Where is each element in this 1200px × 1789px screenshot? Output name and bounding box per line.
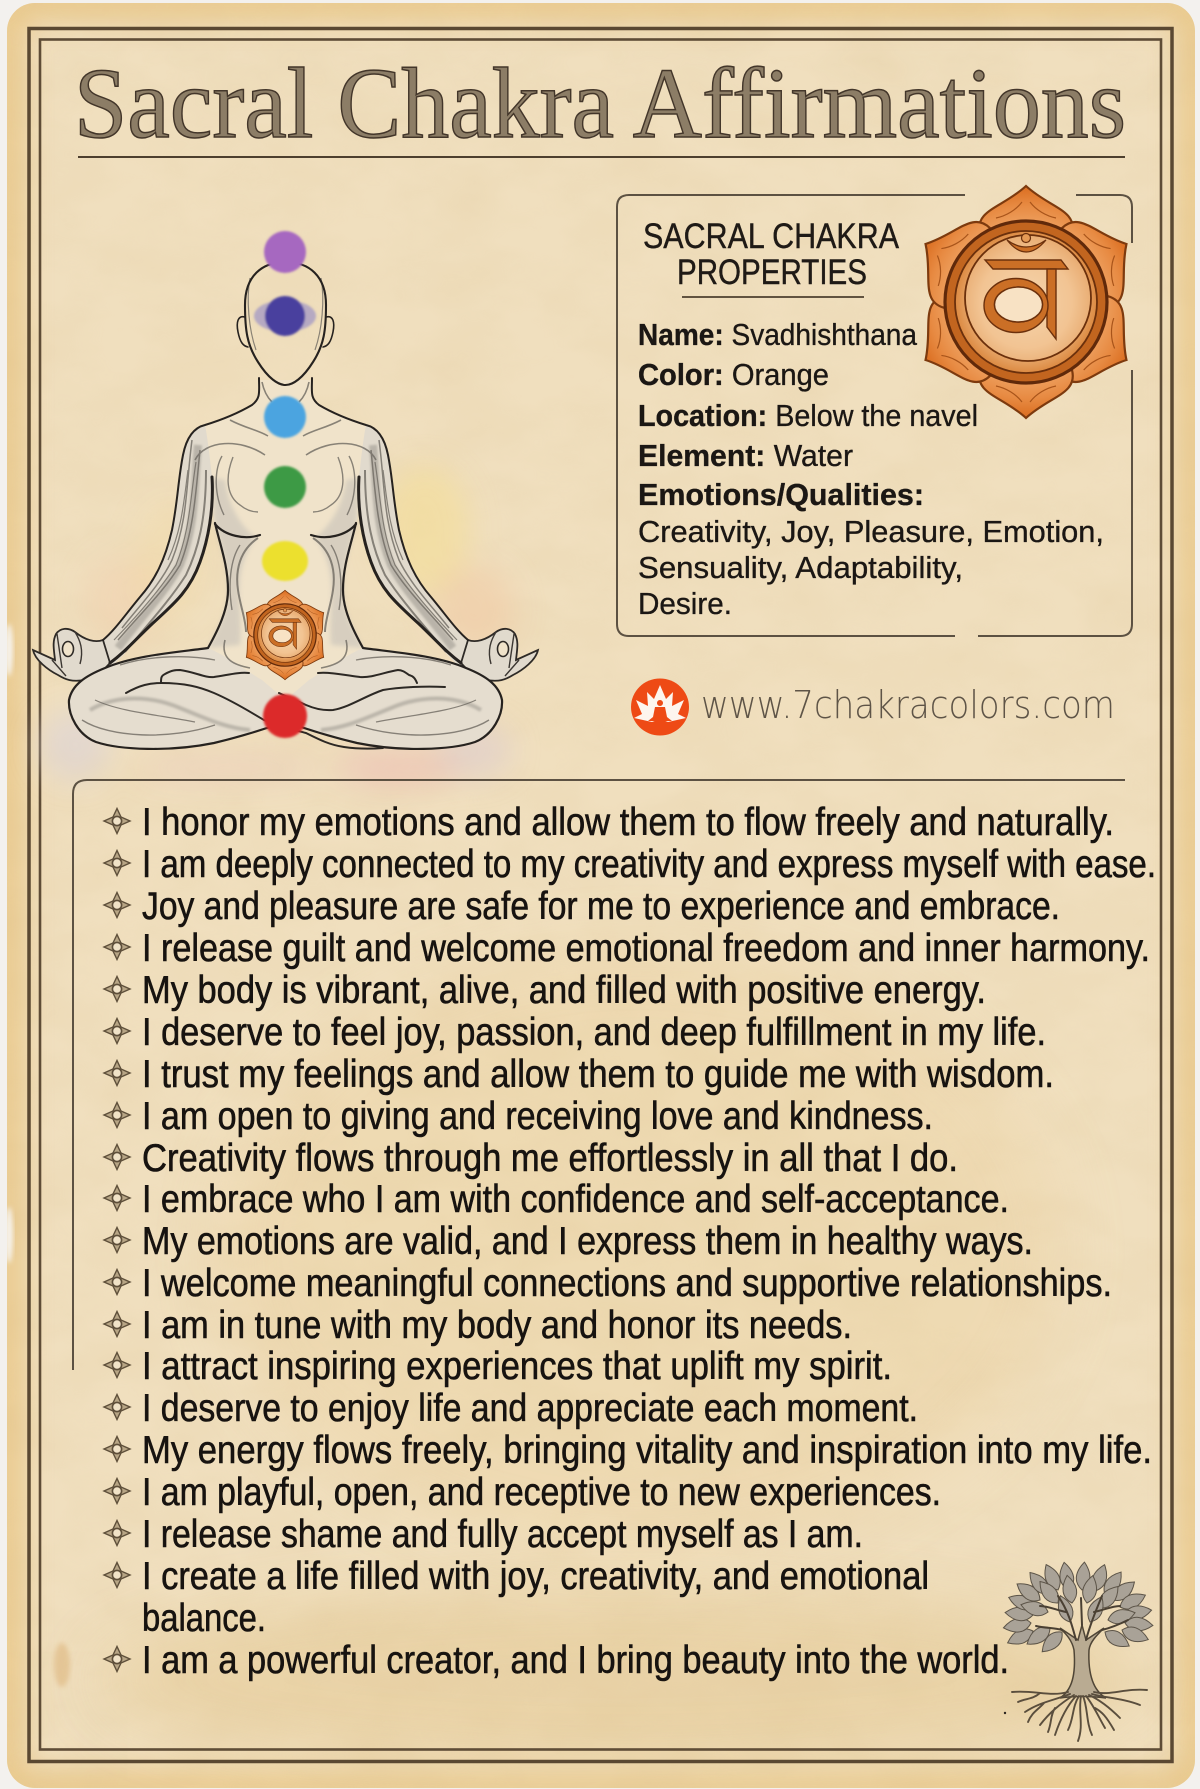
properties box outline (617, 195, 1132, 636)
heading rule (682, 296, 864, 298)
property: emotions values (638, 515, 1104, 621)
affirmation 5: My body is vibrant, alive, and filled with positive energy. (142, 969, 986, 1012)
property: emotions values: Creativity, Joy, Pleasure, Emotion, (638, 515, 1104, 549)
panel: properties (617, 195, 1132, 636)
affirmation 3: Joy and pleasure are safe for me to experience and embrace. (142, 885, 1060, 928)
affirmation 10: I embrace who I am with confidence and self-acceptance. (142, 1178, 1009, 1221)
affirmation 15: I deserve to enjoy life and appreciate each moment. (142, 1387, 918, 1430)
affirmations box outline (73, 780, 1125, 1370)
panel: affirmations (73, 780, 1156, 1682)
affirmation 7: I trust my feelings and allow them to guide me with wisdom. (142, 1053, 1054, 1096)
affirmation 9: Creativity flows through me effortlessly in all that I do. (142, 1137, 958, 1180)
properties heading (643, 217, 900, 292)
figure: left half of body (33, 262, 286, 749)
chakra: third eye (254, 296, 316, 336)
affirmation 6: I deserve to feel joy, passion, and deep fulfillment in my life. (142, 1011, 1046, 1054)
affirmation 20: I am a powerful creator, and I bring beauty into the world. (142, 1639, 1009, 1682)
affirmation 17: I am playful, open, and receptive to new experiences. (142, 1471, 941, 1514)
properties heading: PROPERTIES (677, 253, 867, 292)
property: location: Location: Below the navel (638, 399, 978, 433)
affirmation 11: My emotions are valid, and I express them in healthy ways. (142, 1220, 1033, 1263)
property: name: Name: Svadhishthana (638, 318, 917, 352)
affirmation 18: I release shame and fully accept myself as I am. (142, 1513, 863, 1556)
icon: tree of life (1002, 1561, 1153, 1741)
affirmation 19: I create a life filled with joy, creativity, and emotional (142, 1555, 929, 1598)
title: Sacral Chakra Affirmations (74, 47, 1126, 159)
property: emotions label: Emotions/Qualities: (638, 478, 924, 512)
title underline (78, 156, 1125, 158)
property: element: Element: Water (638, 439, 853, 473)
chakra: root (263, 694, 307, 738)
property: color: Color: Orange (638, 358, 829, 392)
property: emotions values: Desire. (638, 587, 732, 621)
affirmation 19: balance. (142, 1597, 266, 1640)
affirmation 13: I am in tune with my body and honor its needs. (142, 1304, 852, 1347)
website url: www.7chakracolors.com (701, 683, 1115, 727)
watercolour aura behind figure (39, 465, 515, 786)
speck (1004, 1712, 1006, 1714)
affirmation 19 (104, 1555, 929, 1640)
logo: lotus badge (631, 678, 689, 736)
meditating figure with chakras (33, 231, 538, 749)
chakra: throat (264, 396, 306, 438)
figure: right half of body (286, 262, 538, 749)
chakra: solar plexus (262, 541, 308, 581)
chakra: sacral symbol (237, 590, 333, 680)
affirmation 14: I attract inspiring experiences that uplift my spirit. (142, 1345, 892, 1388)
properties heading: SACRAL CHAKRA (643, 217, 900, 256)
affirmation 8: I am open to giving and receiving love and kindness. (142, 1095, 933, 1138)
figure: crossed feet and shins (126, 670, 445, 749)
chakra: crown (264, 231, 306, 273)
icon: sacral chakra symbol (902, 186, 1150, 418)
property: emotions values: Sensuality, Adaptability, (638, 551, 963, 585)
chakra: heart (264, 466, 306, 508)
